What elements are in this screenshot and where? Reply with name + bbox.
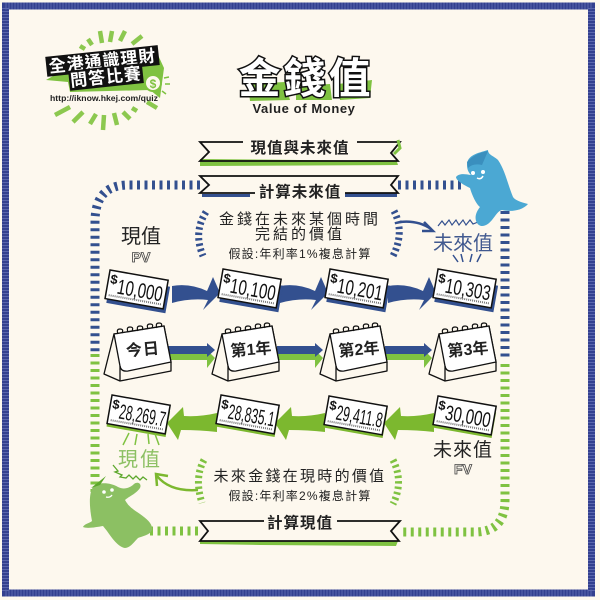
logo: quiz badge (45, 31, 170, 130)
blue value arrows (172, 277, 436, 310)
right bracket green (393, 460, 398, 504)
arrow to present value (156, 474, 198, 490)
timeline arrows (163, 343, 432, 368)
dashed loop: blue part (95, 185, 505, 360)
bill: 10,201 (324, 269, 391, 312)
arrow to future value (400, 222, 433, 231)
calendar: year 1: 第1年 (230, 338, 272, 361)
bill: 28,269.7 (107, 395, 171, 437)
bill: 10,000: $ (109, 271, 120, 288)
ribbon: compute present value (200, 513, 400, 546)
calendar: year 2: 第2年 (338, 338, 380, 361)
coin icon: $ (150, 77, 157, 91)
title: 金錢值 (238, 55, 374, 102)
label: future value FV: FV (454, 461, 473, 477)
label: present value green (113, 433, 162, 480)
quiz title line 1: 全港通識理財 (48, 45, 157, 77)
subtitle: Value of Money (252, 101, 356, 116)
mascot: blue (456, 150, 528, 226)
label: present value green: 現值 (118, 448, 162, 471)
bill: 10,100: $ (222, 270, 233, 287)
left bracket green (198, 460, 204, 503)
bill: 28,835.1: 28,835.1 (226, 401, 276, 432)
bill: 10,303: 10,303 (443, 275, 493, 305)
ribbon: compute future value (200, 176, 398, 201)
future value description: 假設:年利率1%複息計算 (228, 246, 372, 261)
calendar: today (104, 323, 171, 381)
label: present value PV: PV (132, 249, 151, 265)
bill: 10,201: 10,201 (335, 275, 385, 305)
bill: 10,000 (104, 270, 171, 313)
future value description: 金錢在未來某個時間 (219, 210, 381, 228)
bill: 28,269.7: $ (111, 396, 122, 413)
label: future value FV: 未來值 (433, 439, 493, 461)
label: future value FV (433, 439, 493, 477)
sun rays (55, 31, 157, 130)
bill: 10,201: $ (329, 270, 340, 287)
quiz url: http://iknow.hkej.com/quiz (50, 93, 158, 103)
label: future value blue (433, 220, 493, 262)
bill: 28,835.1: $ (220, 396, 231, 413)
bill: 10,303: $ (437, 270, 448, 287)
ribbon label: 計算現值 (267, 513, 333, 532)
bill: 28,269.7: 28,269.7 (117, 401, 167, 432)
calendar: year 3 (429, 323, 496, 381)
future value description (219, 210, 381, 261)
label: present value PV (121, 225, 161, 265)
calendar: today: 今日 (125, 338, 161, 360)
bill: 10,000: 10,000 (115, 276, 165, 306)
bill: 30,000: $ (437, 397, 448, 414)
quiz title line 2: 問答比賽 (69, 63, 143, 91)
bill: 10,100 (217, 269, 284, 312)
bill: 29,411.8: 29,411.8 (334, 402, 384, 433)
bill: 10,100: 10,100 (228, 275, 278, 305)
ribbon: present and future value (200, 139, 400, 166)
ribbon label: 現值與未來值 (250, 139, 350, 157)
bill: 30,000: 30,000 (443, 402, 493, 432)
dashed loop: green part (95, 354, 505, 532)
calendar: year 3: 第3年 (447, 338, 489, 361)
ribbon label: 計算未來值 (259, 182, 341, 201)
present value description (213, 467, 387, 503)
label: future value blue: 未來值 (433, 232, 493, 255)
label: present value PV: 現值 (121, 225, 161, 248)
bill: 29,411.8: $ (328, 397, 339, 414)
bill: 10,303 (432, 269, 499, 312)
bill: 28,835.1 (216, 395, 280, 437)
mascot: green (83, 476, 152, 548)
right bracket blue (393, 211, 399, 256)
calendar: year 2 (320, 323, 387, 381)
green value arrows (167, 407, 434, 440)
present value description: 未來金錢在現時的價值 (213, 467, 387, 485)
future value description: 完結的價值 (255, 226, 345, 243)
bill: 29,411.8 (324, 396, 388, 438)
present value description: 假設:年利率2%複息計算 (228, 488, 372, 503)
bill: 30,000 (433, 396, 497, 438)
calendar: year 1 (212, 323, 279, 381)
left bracket blue (199, 212, 206, 256)
